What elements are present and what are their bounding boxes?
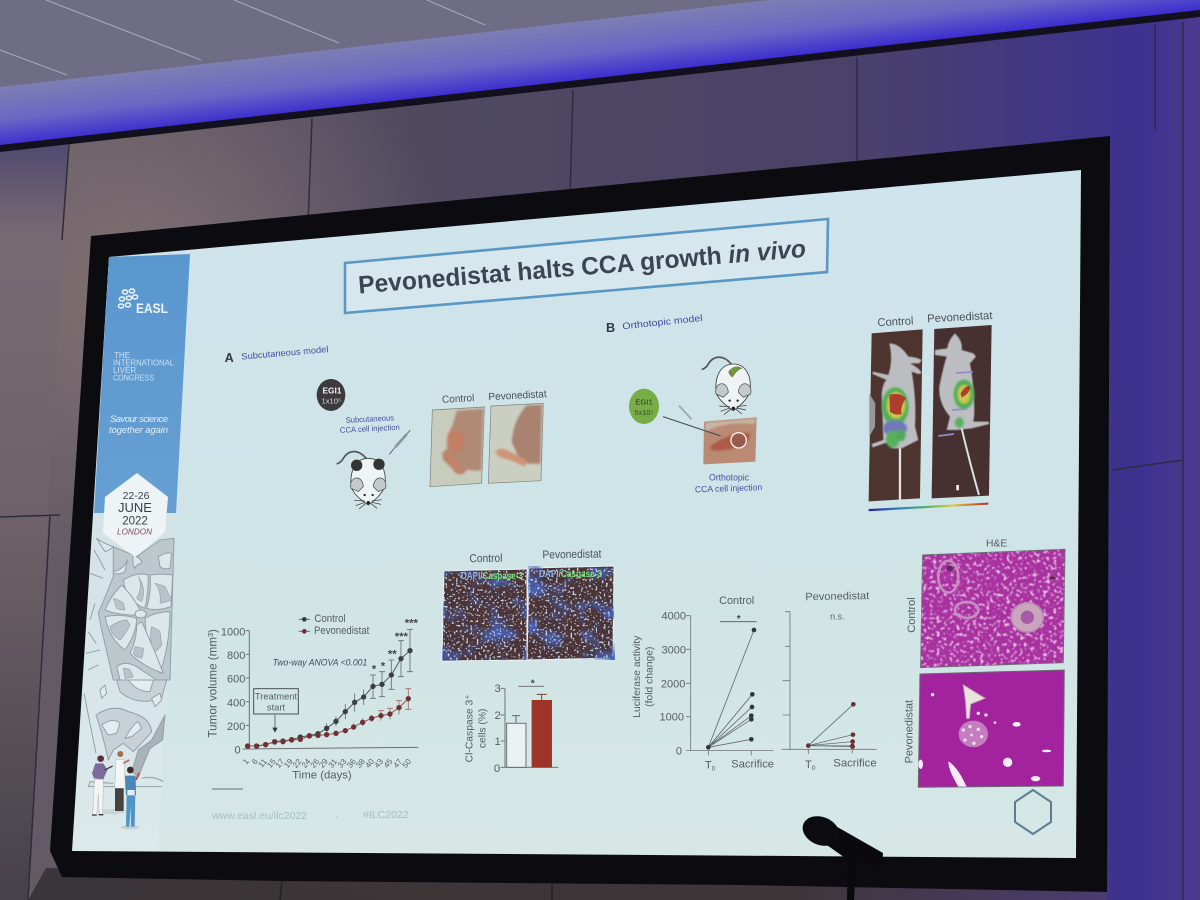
panel A: subcutaneous model — [225, 344, 547, 509]
caspase-3 labels: Control — [469, 553, 503, 565]
x axis tick labels: 31 — [327, 757, 340, 770]
fluorescence image: control — [442, 569, 527, 661]
imaging labels — [877, 310, 994, 329]
significance stars: * — [372, 664, 377, 676]
chart: cleaved caspase-3 bar chart — [464, 679, 558, 775]
caspase-3 labels: Pevonedistat — [542, 548, 602, 562]
chart: cleaved caspase-3 bar chart: 1 — [494, 736, 501, 748]
congress tagline: Savour science — [110, 414, 168, 425]
callout: treatment start: start — [267, 703, 285, 713]
legend: Pevonedistat — [314, 625, 369, 637]
imaging labels: Control — [877, 315, 914, 329]
congress name: THE — [114, 351, 130, 360]
y axis labels: 400 — [227, 697, 245, 709]
injection label: CCA cell injection — [340, 423, 400, 435]
heading B — [606, 313, 703, 335]
heading B: B — [606, 321, 615, 335]
photo: surgical site — [703, 417, 757, 464]
date hexagon: 2022 — [122, 516, 148, 528]
chart: tumor volume line chart — [207, 613, 419, 782]
x axis tick labels: 11 — [257, 757, 269, 769]
chart: luciferase activity, pevonedistat: Sacrifice — [833, 758, 877, 770]
injection label — [695, 473, 762, 494]
logo: EASL — [118, 289, 168, 316]
congress name — [113, 351, 175, 382]
chart: luciferase activity, control: 4000 — [662, 611, 686, 623]
x axis tick labels: 38 — [354, 757, 367, 770]
chart: luciferase activity, pevonedistat: 0 — [812, 765, 816, 772]
x axis tick labels: 47 — [392, 757, 405, 770]
projection screen frame — [50, 136, 1110, 892]
luminescence colour scale — [869, 503, 988, 511]
fluorescence image: treated — [527, 566, 615, 660]
caspase-3 labels — [469, 548, 602, 565]
pointer line — [663, 417, 721, 436]
panel: H&E histology — [903, 538, 1065, 787]
callout: treatment start — [254, 689, 298, 733]
congress name: CONGRESS — [113, 374, 154, 382]
chart: tumor volume line chart: Time (days) — [292, 770, 352, 782]
x axis tick labels: 6 — [250, 757, 260, 766]
x axis tick labels: 50 — [401, 757, 414, 770]
chart: cleaved caspase-3 bar chart: * — [531, 679, 535, 690]
icon: mouse with liver — [702, 357, 751, 415]
injection label: Orthotopic — [709, 473, 749, 483]
heading A: A — [225, 351, 234, 365]
congress name: INTERNATIONAL — [113, 358, 175, 368]
panel: H&E histology: Pevonedistat — [903, 700, 915, 763]
panel: H&E histology: H&E — [986, 538, 1007, 549]
x axis tick labels: 29 — [317, 757, 330, 770]
chart: cleaved caspase-3 bar chart: 3 — [494, 683, 501, 695]
chart: luciferase activity, pevonedistat — [782, 590, 877, 772]
panel: congress sidebar — [73, 254, 190, 851]
illustration: three people — [92, 751, 139, 829]
chart: luciferase activity, control: 2000 — [661, 678, 685, 690]
series: control with error bars — [245, 629, 413, 749]
x axis tick labels: 36 — [345, 757, 358, 770]
chart: luciferase activity, pevonedistat: T — [805, 759, 812, 771]
x axis tick labels: 1 — [241, 757, 251, 766]
heading A — [225, 344, 329, 365]
microphone — [798, 811, 883, 900]
chart: luciferase activity, control: 3000 — [662, 644, 686, 656]
y axis labels — [221, 626, 245, 756]
photo: treated mouse — [488, 403, 543, 483]
x axis tick labels: 33 — [336, 757, 349, 770]
x axis tick labels: 17 — [274, 757, 287, 770]
chart: cleaved caspase-3 bar chart: cells (%) — [477, 709, 488, 748]
x axis tick labels: 19 — [282, 757, 295, 770]
fluorescence image: treated: DAPI/Caspase-3 — [539, 569, 602, 580]
x axis tick labels: 15 — [265, 757, 278, 770]
x axis tick labels: 22 — [291, 757, 304, 770]
chart: luciferase activity, pevonedistat: n.s. — [830, 611, 845, 621]
statistics note: Two-way ANOVA <0.001 — [273, 657, 367, 667]
chart: luciferase activity, pevonedistat: Pevonedistat — [805, 590, 869, 603]
footer links — [211, 809, 409, 822]
bioluminescence image: control — [869, 329, 923, 501]
cell line badge EGI1: 5x10⁵ — [635, 408, 653, 417]
chart: cleaved caspase-3 bar chart: Cl-Caspase 3⁺ — [464, 694, 475, 762]
title: Pevonedistat halts CCA growth in vivo — [357, 235, 807, 299]
heading A: Subcutaneous model — [241, 344, 329, 362]
series: pevonedistat with error bars — [245, 689, 411, 749]
footer links: www.easl.eu/ilc2022 — [211, 810, 307, 822]
panel: H&E histology: Control — [906, 597, 918, 633]
photo labels: Control — [442, 393, 475, 406]
illustration: lower liver tissue map — [84, 680, 167, 787]
axes — [243, 631, 418, 749]
significance stars — [372, 618, 419, 676]
chart: luciferase activity, control: Luciferase activity — [632, 635, 643, 718]
cell line badge EGI1: EGI1 — [635, 398, 653, 407]
photo: control mouse — [430, 407, 484, 487]
significance stars: *** — [405, 618, 419, 630]
y axis labels: 800 — [227, 650, 245, 662]
date hexagon: 22-26 — [123, 490, 150, 502]
callout: treatment start: Treatment — [255, 691, 297, 701]
histology image: treated — [918, 670, 1064, 787]
fluorescence image: control: DAPI/Caspase-3 — [461, 571, 523, 582]
illustration: upper liver tissue map — [86, 538, 174, 680]
blue lit bulkhead — [0, 0, 1200, 148]
chart: cleaved caspase-3 bar chart: 2 — [494, 710, 501, 722]
significance stars: *** — [395, 631, 409, 643]
x axis tick labels: 43 — [373, 757, 386, 770]
chart: luciferase activity, control: Sacrifice — [731, 759, 774, 771]
chart: tumor volume line chart: Tumor volume (mm³) — [207, 629, 220, 738]
y axis labels: 600 — [227, 673, 245, 685]
icon: hexagon mark — [1015, 790, 1051, 834]
cell line badge EGI1 — [629, 389, 659, 424]
y axis labels: 1000 — [221, 626, 245, 638]
imaging labels: Pevonedistat — [927, 310, 994, 325]
icon: grey syringe — [679, 406, 692, 419]
chart: luciferase activity, control: * — [737, 614, 741, 625]
congress tagline — [109, 414, 168, 436]
footer links: · — [335, 810, 338, 822]
injection label — [340, 413, 400, 435]
chart: luciferase activity, control: 1000 — [660, 712, 684, 724]
date hexagon: LONDON — [117, 528, 152, 536]
injection label: Subcutaneous — [345, 413, 394, 425]
chart: luciferase activity, control: (fold change) — [645, 647, 656, 707]
heading B: Orthotopic model — [622, 313, 703, 331]
x axis tick labels — [241, 757, 414, 770]
chart: luciferase activity, control: 0 — [712, 766, 716, 773]
chart: luciferase activity, control — [632, 595, 774, 773]
congress tagline: together again — [109, 425, 168, 436]
icon: syringe — [389, 430, 410, 454]
significance stars: ** — [388, 649, 397, 661]
cell line badge EGI1: 1x10⁶ — [321, 397, 341, 406]
slide background — [72, 170, 1081, 858]
photo labels — [442, 389, 547, 406]
x axis tick labels: 45 — [382, 757, 395, 770]
x axis tick labels: 26 — [309, 757, 322, 770]
injection label: CCA cell injection — [695, 482, 762, 494]
footer rule — [212, 788, 243, 790]
panel B: orthotopic model — [606, 310, 994, 511]
chart: cleaved caspase-3 bar chart: 0 — [494, 763, 500, 775]
congress name: LIVER — [113, 366, 136, 375]
ceiling — [0, 0, 1200, 150]
icon: mouse with two tumours — [337, 452, 386, 509]
x axis tick labels: 40 — [364, 757, 377, 770]
legend — [299, 613, 369, 637]
chart: luciferase activity, control: 0 — [676, 746, 682, 758]
logo: EASL: EASL — [136, 300, 168, 316]
date hexagon: JUNE — [118, 500, 152, 515]
footer links: #ILC2022 — [363, 809, 409, 821]
chart: luciferase activity, control: T — [705, 760, 712, 772]
date hexagon — [103, 473, 168, 557]
cell line badge EGI1 — [317, 379, 345, 411]
title — [345, 219, 828, 313]
wall strip below the screen — [28, 868, 1107, 900]
y axis labels: 200 — [227, 721, 245, 733]
histology image: control — [921, 549, 1065, 668]
bioluminescence image: treated — [932, 325, 992, 498]
legend: Control — [314, 613, 346, 625]
cell line badge EGI1: EGI1 — [322, 385, 342, 395]
x axis tick labels: 24 — [300, 757, 313, 770]
y axis labels: 0 — [235, 744, 241, 756]
chart: luciferase activity, control: Control — [719, 595, 754, 607]
significance stars: * — [381, 660, 386, 672]
photo labels: Pevonedistat — [488, 389, 547, 403]
